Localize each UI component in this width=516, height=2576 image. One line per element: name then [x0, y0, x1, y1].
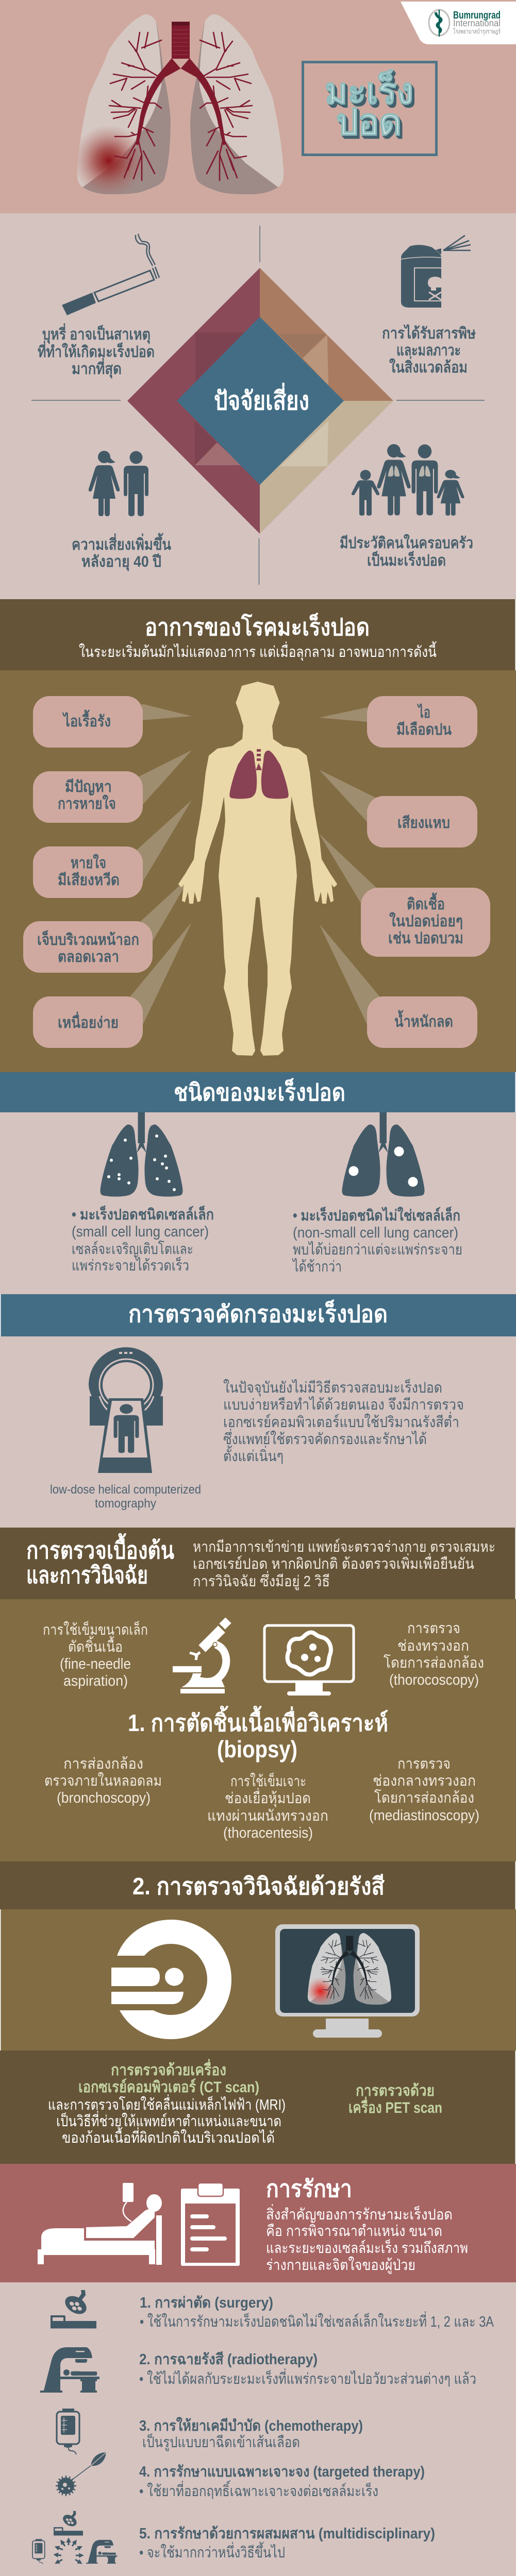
heading: biopsy: [128, 1705, 388, 1762]
item: targeted therapy: 4. การรักษาแบบเฉพาะเจาะจง (targeted therapy): [139, 2464, 425, 2480]
text: non-small cell lung cancer: พบได้บ่อยกว่าแต่จะแพร่กระจาย: [293, 1241, 462, 1258]
panel: title background: [0, 0, 516, 213]
callout: breathing problems: มีปัญหา: [65, 778, 112, 796]
text: screening paragraph: แบบง่ายหรือทำได้ด้วยตนเอง จึงมีการตรวจ: [223, 1396, 464, 1413]
panel: imaging description: ของก้อนเนื้อที่ผิดปกติในบริเวณปอดได้: [62, 2127, 275, 2146]
item: chemotherapy: 3. การให้ยาเคมีบำบัด (chemotherapy): [139, 2417, 363, 2434]
text: toxins and pollution: และมลภาวะ: [396, 342, 461, 359]
icon: lungs small cell: [100, 1112, 182, 1197]
text: bronchoscopy: การส่องกล้อง: [63, 1756, 143, 1772]
illustration: human body with lungs: [179, 682, 337, 1055]
text: fine-needle aspiration: ตัดชิ้นเนื้อ: [68, 1636, 123, 1655]
callout: chronic cough: [33, 696, 143, 748]
icon: CT scanner with patient: [89, 1347, 163, 1473]
text: screening paragraph: ในปัจจุบันยังไม่มีวิธีตรวจสอบมะเร็งปอด: [223, 1378, 442, 1397]
text: CT scan caption: [50, 1483, 201, 1511]
text: non-small cell lung cancer: (non-small cell lung cancer): [293, 1225, 458, 1241]
text: mediastinoscopy: ช่องกลางทรวงอก: [373, 1773, 476, 1789]
title box: มะเร็งปอด: มะเร็ง: [325, 69, 413, 111]
text: small cell lung cancer: • มะเร็งปอดชนิดเซลล์เล็ก: [72, 1205, 214, 1223]
logo: Bumrungrad International: โรงพยาบาลบำรุงราษฎร์: [453, 28, 501, 36]
text: cigarette risk: บุหรี่ อาจเป็นสาเหตุ: [42, 323, 151, 344]
item: surgery: 1. การผ่าตัด (surgery): [140, 2295, 273, 2311]
item: radiotherapy: [139, 2351, 476, 2387]
text: small cell lung cancer: (small cell lung cancer): [72, 1224, 209, 1240]
logo: Bumrungrad International: [401, 2, 516, 44]
heading: types of lung cancer: ชนิดของมะเร็งปอด: [174, 1078, 345, 1106]
callout: chest pain: เจ็บบริเวณหน้าอก: [37, 930, 139, 948]
title box: มะเร็งปอด: ปอด: [336, 102, 402, 142]
text: mediastinoscopy: โดยการส่องกล้อง: [374, 1789, 474, 1806]
text: family history: [340, 534, 473, 569]
callout: chest pain: ตลอดเวลา: [58, 948, 119, 965]
panel: initial diagnosis header: [0, 1528, 515, 1599]
panel: imaging description: เป็นวิธีที่ช่วยให้แพทย์หาตำแหน่งและขนาด: [56, 2111, 281, 2130]
text: family history: มีประวัติคนในครอบครัว: [340, 534, 473, 552]
callout: breathing problems: การหายใจ: [58, 794, 116, 812]
icon: toxic spray can: [401, 235, 471, 308]
callout: coughing blood: ไอ: [417, 703, 430, 721]
text: thoracoscopy: [384, 1620, 484, 1688]
panel: imaging description: [0, 2050, 515, 2164]
callout: fatigue: เหนื่อยง่าย: [58, 1011, 119, 1031]
text: fine-needle aspiration: การใช้เข็มขนาดเล็ก: [43, 1620, 148, 1638]
icon: cigarette: [62, 234, 159, 315]
text: screening paragraph: เอกซเรย์คอมพิวเตอร์แบบใช้ปริมาณรังสีต่ำ: [223, 1412, 459, 1431]
text: mediastinoscopy: (mediastinoscopy): [369, 1807, 479, 1824]
icon: clipboard: [181, 2183, 240, 2266]
panel: symptoms header: ในระยะเริ่มต้นมักไม่แสดงอาการ แต่เมื่อลุกลาม อาจพบอาการดังนี้: [79, 641, 437, 661]
heading: radiology diagnosis: [0, 1861, 515, 1909]
panel: symptoms header: [0, 599, 515, 670]
logo: Bumrungrad International: International: [453, 18, 501, 28]
callout: wheezing: มีเสียงหวีด: [58, 872, 120, 889]
text: screening paragraph: [223, 1378, 464, 1465]
text: bronchoscopy: [44, 1756, 162, 1806]
text: treatment intro: สิ่งสำคัญของการรักษามะเร็งปอด: [266, 2204, 453, 2223]
text: screening paragraph: ซึ่งแพทย์ใช้ตรวจคัดกรองและรักษาได้: [223, 1429, 427, 1448]
heading: types of lung cancer: [0, 1072, 515, 1112]
icon: surgery: [51, 2290, 96, 2329]
panel: treatment header: [0, 2164, 516, 2282]
icon: patient in hospital bed: [38, 2183, 162, 2265]
heading: biopsy: 1. การตัดชิ้นเนื้อเพื่อวิเคราะห์: [128, 1705, 388, 1736]
heading: lung cancer screening: [1, 1294, 516, 1336]
text: toxins and pollution: [382, 324, 476, 376]
text: cigarette risk: [38, 323, 155, 379]
icon: microscope: [173, 1620, 228, 1693]
panel: initial diagnosis header: การวินิจฉัย ซึ่งมีอยู่ 2 วิธี: [193, 1571, 330, 1590]
callout: weight loss: [367, 996, 477, 1048]
callout: coughing blood: มีเลือดปน: [396, 721, 452, 738]
panel: imaging description: การตรวจด้วย: [356, 2082, 435, 2099]
text: age risk: [72, 533, 171, 571]
callout: recurring lung infection: ในปอดบ่อยๆ: [389, 912, 463, 930]
text: treatment intro: [266, 2175, 468, 2274]
panel: screening background: [0, 1336, 516, 1528]
item: surgery: [140, 2295, 494, 2330]
panel: treatment list background: [0, 2282, 516, 2576]
panel: initial diagnosis header: เอกซเรย์ปอด หากผิดปกติ ต้องตรวจเพิ่มเพื่อยืนยัน: [193, 1553, 474, 1572]
text: small cell lung cancer: เซลล์จะเจริญเติบโตและ: [72, 1240, 193, 1258]
heading: biopsy: (biopsy): [217, 1736, 297, 1762]
text: cigarette risk: ที่ทำให้เกิดมะเร็งปอด: [38, 341, 155, 361]
item: multidisciplinary: • จะใช้มากกว่าหนึ่งวิธีขึ้นไป: [139, 2541, 285, 2561]
panel: imaging description: เอกซเรย์คอมพิวเตอร์ (CT scan): [78, 2078, 259, 2096]
icon: lungs non-small cell: [342, 1112, 425, 1197]
item: targeted therapy: • ใช้ยาที่ออกฤทธิ์เฉพาะเจาะจงต่อเซลล์มะเร็ง: [139, 2480, 378, 2500]
callout: chest pain: [23, 921, 153, 973]
panel: imaging background: [1, 1909, 516, 2050]
diagram: risk factor diamond: [127, 268, 393, 534]
text: thoracoscopy: (thorocoscopy): [389, 1672, 479, 1688]
text: thoracentesis: การใช้เข็มเจาะ: [230, 1772, 306, 1790]
text: bronchoscopy: (bronchoscopy): [57, 1790, 151, 1806]
text: fine-needle aspiration: aspiration): [63, 1673, 128, 1689]
text: treatment intro: ร่างกายและจิตใจของผู้ป่วย: [266, 2256, 415, 2274]
text: non-small cell lung cancer: ได้ช้ากว่า: [292, 1258, 342, 1275]
icon: targeted dart and virus: [56, 2452, 106, 2496]
callout: recurring lung infection: [361, 888, 490, 957]
diagram: risk factor diamond: ปัจจัยเสี่ยง: [214, 383, 309, 415]
callout: fatigue: [33, 996, 143, 1048]
panel: symptoms header: อาการของโรคมะเร็งปอด: [145, 613, 370, 640]
text: fine-needle aspiration: (fine-needle: [60, 1656, 131, 1672]
text: thoracentesis: ช่องเยื่อหุ้มปอด: [225, 1788, 311, 1807]
text: non-small cell lung cancer: • มะเร็งปอดชนิดไม่ใช่เซลล์เล็ก: [293, 1206, 460, 1224]
panel: imaging description: เครื่อง PET scan: [348, 2096, 442, 2116]
item: multidisciplinary: 5. การรักษาด้วยการผสมผสาน (multidisciplinary): [139, 2526, 435, 2542]
panel: risk factors background: [0, 213, 516, 599]
text: thoracoscopy: โดยการส่องกล้อง: [384, 1654, 484, 1671]
text: bronchoscopy: ตรวจภายในหลอดลม: [44, 1772, 162, 1789]
callout: breathing problems: [33, 771, 143, 823]
text: non-small cell lung cancer: [292, 1206, 462, 1275]
logo: Bumrungrad International: Bumrungrad: [453, 10, 501, 21]
item: radiotherapy: 2. การฉายรังสี (radiotherapy): [139, 2351, 318, 2368]
callout: hoarse voice: [367, 796, 477, 848]
icon: monitor with cell: [264, 1625, 354, 1696]
pointers to body: [130, 704, 380, 1026]
text: screening paragraph: ตั้งแต่เนิ่นๆ: [223, 1445, 284, 1465]
text: thoracoscopy: ช่องทรวงอก: [397, 1638, 469, 1654]
item: chemotherapy: [139, 2417, 363, 2451]
icon: family with lungs: [352, 444, 464, 516]
text: CT scan caption: tomography: [95, 1497, 156, 1511]
text: treatment intro: การรักษา: [266, 2175, 352, 2202]
text: thoracoscopy: การตรวจ: [407, 1620, 460, 1637]
text: treatment intro: คือ การพิจารณาตำแหน่ง ขนาด: [266, 2223, 442, 2240]
panel: imaging description: การตรวจด้วยเครื่อง: [111, 2059, 226, 2079]
text: fine-needle aspiration: [43, 1620, 148, 1689]
illustration: lungs with tumor: [73, 14, 284, 201]
callout: wheezing: หายใจ: [71, 854, 106, 872]
icon: chemotherapy bag: [57, 2409, 79, 2454]
icon: radiotherapy: [40, 2347, 99, 2393]
text: cigarette risk: มากที่สุด: [72, 358, 122, 379]
callout: weight loss: น้ำหนักลด: [394, 1010, 453, 1030]
item: multidisciplinary: [139, 2526, 435, 2561]
text: age risk: ความเสี่ยงเพิ่มขึ้น: [72, 533, 171, 553]
icon: monitor showing lung scan: [275, 1924, 420, 2038]
heading: radiology diagnosis: 2. การตรวจวินิจฉัยด้วยรังสี: [132, 1873, 385, 1900]
callout: recurring lung infection: เช่น ปอดบวม: [388, 930, 463, 947]
text: toxins and pollution: ในสิ่งแวดล้อม: [389, 356, 468, 376]
panel: initial diagnosis header: และการวินิจฉัย: [26, 1562, 148, 1588]
text: thoracentesis: [207, 1772, 328, 1841]
text: CT scan caption: low-dose helical computerized: [50, 1483, 201, 1497]
text: age risk: หลังอายุ 40 ปี: [81, 553, 161, 571]
text: thoracentesis: แทงผ่านผนังทรวงอก: [207, 1808, 328, 1824]
text: toxins and pollution: การได้รับสารพิษ: [382, 324, 476, 342]
icon: multidisciplinary: [32, 2511, 117, 2564]
heading: lung cancer screening: การตรวจคัดกรองมะเร็งปอด: [128, 1299, 388, 1327]
text: treatment intro: และระยะของเซลล์มะเร็ง รวมถึงสภาพ: [266, 2239, 468, 2257]
text: mediastinoscopy: การตรวจ: [397, 1756, 451, 1772]
panel: biopsy background: [0, 1599, 516, 1861]
callout: wheezing: [33, 846, 143, 898]
text: thoracentesis: (thoracentesis): [223, 1825, 313, 1841]
text: small cell lung cancer: แพร่กระจายได้รวดเร็ว: [72, 1256, 189, 1274]
text: family history: เป็นมะเร็งปอด: [367, 551, 446, 569]
callout: chronic cough: ไอเรื้อรัง: [62, 709, 111, 730]
panel: initial diagnosis header: การตรวจเบื้องต้น: [26, 1533, 174, 1564]
text: small cell lung cancer: [72, 1205, 214, 1274]
panel: imaging description: และการตรวจโดยใช้คลื่นแม่เหล็กไฟฟ้า (MRI): [48, 2094, 286, 2113]
item: chemotherapy: เป็นรูปแบบยาฉีดเข้าเส้นเลือด: [142, 2433, 300, 2451]
text: mediastinoscopy: [369, 1756, 479, 1824]
item: targeted therapy: [139, 2464, 425, 2500]
panel: symptoms background: [0, 670, 516, 1072]
icon: adult couple: [89, 451, 148, 516]
icon: MRI scanner: [111, 1920, 231, 2039]
callout: hoarse voice: เสียงแหบ: [397, 815, 450, 832]
callout: coughing blood: [367, 696, 477, 748]
panel: types background: [0, 1112, 516, 1294]
title box: มะเร็งปอด: [303, 62, 436, 155]
callout: recurring lung infection: ติดเชื้อ: [407, 892, 445, 913]
